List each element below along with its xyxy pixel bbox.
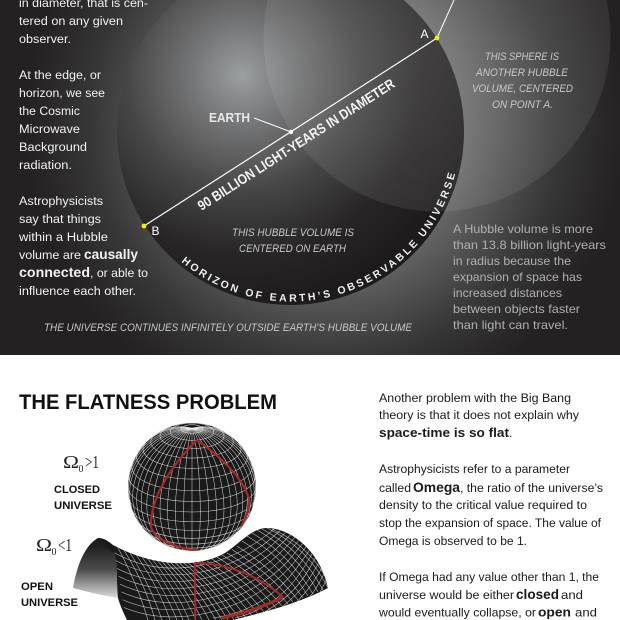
icon: open universe saddle with grid and triangle	[73, 525, 331, 620]
label: closed universe	[54, 484, 112, 512]
caption: this sphere is another Hubble volume	[472, 51, 573, 111]
label: omega greater than 1: 0	[78, 464, 84, 475]
caption: this Hubble volume is centered on Earth: THIS HUBBLE VOLUME IS	[232, 227, 354, 239]
caption: this Hubble volume is centered on Earth	[232, 228, 354, 252]
label: open universe: OPEN	[21, 581, 53, 593]
text block: Hubble volume explanation at left: Microwave	[19, 122, 80, 136]
text block: flatness problem explanation: If Omega had any value other than 1, the	[379, 570, 599, 584]
curved label: horizon of Earth's observable universe: HORIZON OF EARTH’S OBSERVABLE UNIVERSE	[182, 172, 456, 302]
text block: why a Hubble volume exceeds 13.8 billion light-years: expansion of space has	[453, 270, 582, 284]
triangle on closed universe	[151, 440, 249, 551]
text block: Hubble volume explanation at left: the Cosmic	[19, 104, 80, 118]
text block: Hubble volume explanation at left: volume are	[19, 248, 81, 262]
text block: Hubble volume explanation at left	[18, 0, 148, 298]
text block: why a Hubble volume exceeds 13.8 billion light-years: A Hubble volume is more	[453, 222, 593, 236]
sphere: Earth's observable universe	[117, 0, 464, 305]
text block: flatness problem explanation: , the ratio of the universe’s	[460, 481, 603, 495]
caption: this sphere is another Hubble volume: VOLUME, CENTERED	[472, 83, 573, 95]
text block: why a Hubble volume exceeds 13.8 billion light-years: than 13.8 billion light-years	[453, 238, 606, 252]
label: closed universe: CLOSED	[54, 484, 100, 496]
caption: this sphere is another Hubble volume: ON POINT A.	[492, 99, 553, 111]
text block: flatness problem explanation: called	[379, 481, 411, 495]
text block: Hubble volume explanation at left: causally	[84, 247, 138, 262]
point: A	[435, 36, 439, 40]
text block: Hubble volume explanation at left: say that things	[19, 212, 101, 226]
text block: flatness problem explanation: Omega is observed to be 1.	[379, 534, 527, 548]
text block: flatness problem explanation	[378, 391, 603, 620]
caption: this sphere is another Hubble volume: ANOTHER HUBBLE	[475, 67, 569, 79]
label: omega less than 1: <1	[58, 535, 72, 555]
text block: Hubble volume explanation at left: tered on any given	[19, 14, 123, 28]
text block: why a Hubble volume exceeds 13.8 billion light-years: between objects faster	[453, 302, 580, 316]
icon: closed universe sphere with grid and triangle	[128, 423, 256, 551]
text block: why a Hubble volume exceeds 13.8 billion light-years	[453, 222, 606, 332]
text block: Hubble volume explanation at left: Background	[19, 140, 87, 154]
point: B	[142, 224, 146, 228]
text block: flatness problem explanation: Omega	[413, 479, 460, 495]
text block: flatness problem explanation: would eventually collapse, or	[378, 606, 536, 620]
label: omega greater than 1	[63, 452, 99, 475]
text block: flatness problem explanation: universe would be either	[379, 588, 514, 602]
text block: flatness problem explanation: closed	[516, 587, 559, 602]
text block: Hubble volume explanation at left: horizon, we see	[19, 86, 105, 100]
label: omega greater than 1: Ω	[63, 452, 79, 472]
text block: Hubble volume explanation at left: radiation.	[19, 158, 72, 172]
thick lower edge of open universe triangle	[222, 597, 283, 618]
text block: why a Hubble volume exceeds 13.8 billion light-years: in radius because the	[453, 254, 571, 268]
leader line from Earth label	[254, 118, 290, 132]
text block: flatness problem explanation: Astrophysicists refer to a parameter	[379, 462, 570, 476]
panel: Hubble volume dark background	[0, 0, 620, 355]
text block: flatness problem explanation: open	[538, 604, 571, 620]
label: omega less than 1: Ω	[36, 535, 52, 555]
diameter line through Earth from B to A	[144, 38, 437, 226]
label: omega less than 1	[36, 535, 72, 558]
text block: Hubble volume explanation at left: observer.	[19, 32, 71, 46]
label: open universe	[21, 581, 78, 609]
text block: flatness problem explanation: and	[575, 606, 597, 620]
caption: this Hubble volume is centered on Earth: CENTERED ON EARTH	[239, 243, 346, 255]
text block: flatness problem explanation: Another problem with the Big Bang	[379, 391, 571, 405]
text block: flatness problem explanation: stop the expansion of space. The value of	[379, 516, 602, 530]
caption: this sphere is another Hubble volume: THIS SPHERE IS	[485, 51, 559, 63]
text block: why a Hubble volume exceeds 13.8 billion light-years: increased distances	[453, 286, 562, 300]
label: omega less than 1: 0	[52, 547, 56, 558]
text block: Hubble volume explanation at left: influence each other.	[19, 284, 136, 298]
text block: Hubble volume explanation at left: within a Hubble	[18, 230, 108, 244]
label: omega greater than 1: >1	[85, 452, 99, 472]
text block: flatness problem explanation: .	[509, 426, 512, 440]
text block: Hubble volume explanation at left: , or able to	[90, 266, 148, 280]
label: Earth: EARTH	[209, 110, 250, 125]
text block: flatness problem explanation: and	[561, 588, 583, 602]
text block: Hubble volume explanation at left: connected	[19, 265, 90, 280]
label: B: B	[152, 224, 160, 238]
text block: flatness problem explanation: density to the critical value required to	[379, 498, 587, 512]
leader line from point A upward	[437, 0, 454, 38]
label: closed universe: UNIVERSE	[54, 500, 112, 512]
heading: the flatness problem: THE FLATNESS PROBLEM	[19, 391, 277, 414]
caption: the universe continues infinitely: THE UNIVERSE CONTINUES INFINITELY OUTSIDE EARTH’S HUBBLE VOLUME	[44, 322, 413, 334]
label: A: A	[420, 27, 429, 41]
text block: flatness problem explanation: space-time is so flat	[379, 425, 510, 440]
point: Earth	[289, 130, 293, 134]
label: open universe: UNIVERSE	[21, 597, 78, 609]
label: diameter of 90 billion light-years: 90 BILLION LIGHT-YEARS IN DIAMETER	[194, 75, 398, 214]
triangle on open universe	[195, 563, 283, 619]
text block: Hubble volume explanation at left: At the edge, or	[19, 68, 101, 82]
text block: why a Hubble volume exceeds 13.8 billion light-years: than light can travel.	[453, 318, 568, 332]
text block: Hubble volume explanation at left: Astrophysicists	[19, 194, 103, 208]
sphere: second Hubble volume centered on A	[264, 0, 610, 212]
text block: flatness problem explanation: theory is that it does not explain why	[379, 408, 580, 422]
